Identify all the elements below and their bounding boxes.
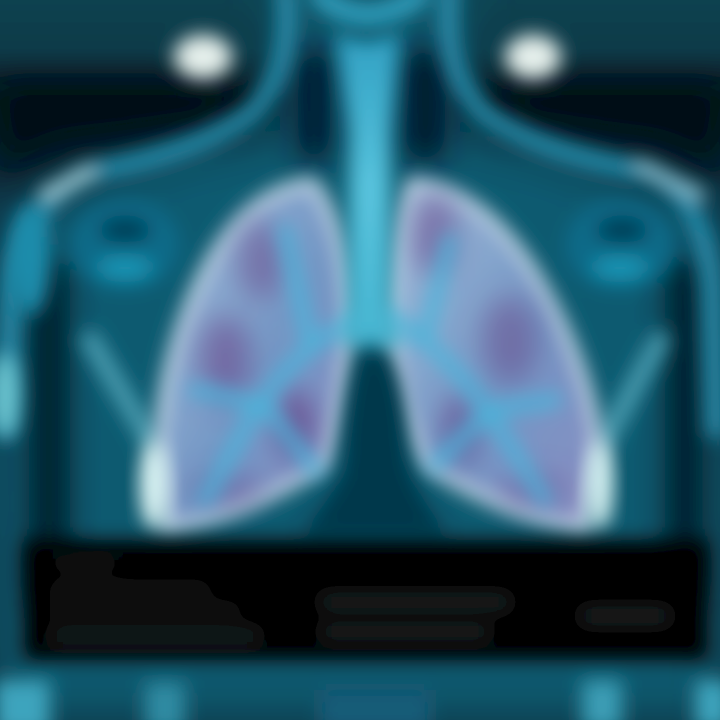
bronchi [385, 240, 555, 500]
right glowing dot [505, 35, 561, 79]
shoulder joints [0, 200, 675, 437]
dark areas beside the neck [0, 50, 720, 600]
purple patches [187, 220, 313, 506]
blurred caption text [50, 558, 670, 642]
lower body glows [0, 680, 720, 720]
neck and shoulder outlines [5, 0, 716, 440]
central dark mediastinum [300, 345, 450, 535]
purple patches [413, 193, 569, 506]
trachea [335, 30, 405, 345]
caption panel [24, 540, 708, 660]
right lung [385, 182, 600, 530]
right edge glow [587, 441, 613, 529]
bronchi [195, 230, 360, 500]
left lung [158, 182, 360, 530]
left glowing dot [174, 35, 232, 79]
left edge glow [140, 441, 168, 529]
